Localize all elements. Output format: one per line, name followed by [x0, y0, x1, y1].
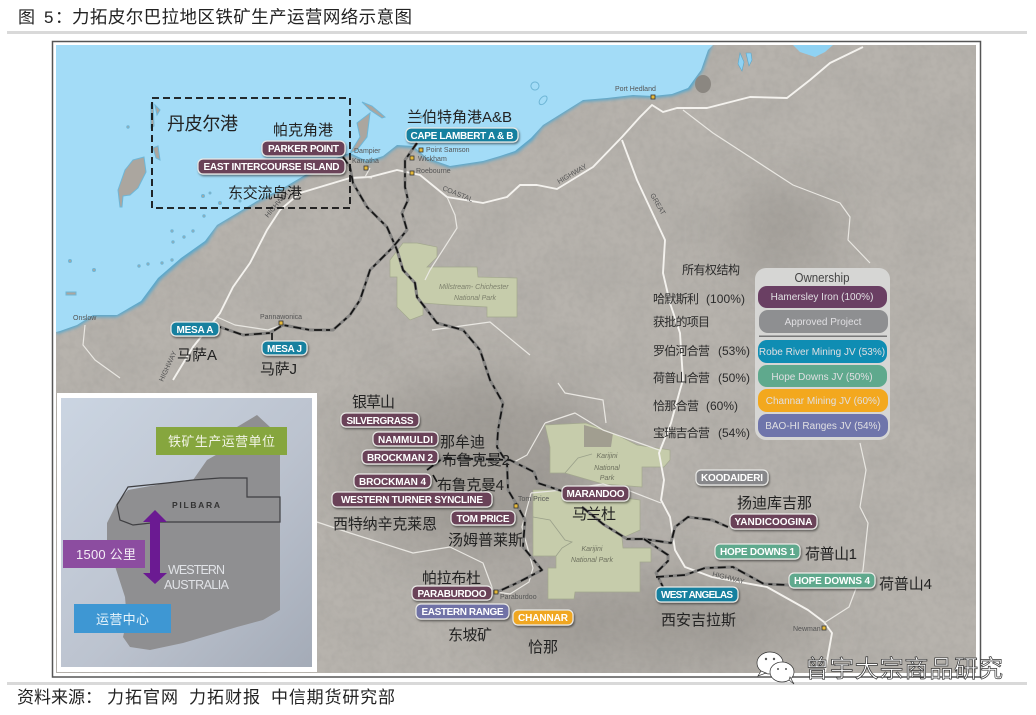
pill: Nammuldi: NAMMULDI: [378, 435, 433, 446]
pill: East Intercourse Island: EAST INTERCOURSE ISLAND: [204, 162, 340, 173]
pill: West Angelas: WEST ANGELAS: [661, 590, 733, 601]
national park: Karijini: National Park: [571, 557, 614, 564]
port and mine labels: [167, 109, 932, 656]
ownership legend: Ownership: [794, 270, 850, 285]
pill: Parker Point: PARKER POINT: [268, 144, 339, 155]
ownership Chinese text: 所有权结构: [682, 262, 740, 277]
pill: Hope Downs 4: HOPE DOWNS 4: [794, 576, 870, 587]
pill: Brockman 4: BROCKMAN 4: [359, 477, 426, 488]
ownership Chinese text: (54%): [718, 426, 750, 440]
label: 马萨A: 马萨A: [177, 347, 217, 364]
label: 那牟迪: 那牟迪: [440, 434, 485, 451]
title: 5: [44, 8, 53, 27]
title: ：: [55, 8, 72, 27]
ownership Chinese text: 宝瑞吉合营: [653, 425, 710, 440]
ownership Chinese text: [653, 262, 750, 440]
pill: Tom Price: TOM PRICE: [456, 514, 510, 525]
outline: Pilbara region: [117, 478, 280, 525]
national park: Millstream-Chichester: [390, 243, 517, 320]
pill: Western Turner Syncline: WESTERN TURNER SYNCLINE: [341, 495, 483, 506]
pill: Brockman 4: [354, 474, 431, 488]
national park: Karijini: National: [594, 465, 620, 472]
town markers and labels: Paraburdoo: [500, 594, 537, 601]
label: 恰那: 恰那: [528, 639, 558, 656]
pill: Mesa A: [171, 322, 219, 336]
pill: Yandicoogina: [730, 514, 817, 529]
pill: Paraburdoo: [412, 586, 492, 600]
ownership Chinese text: 哈默斯利: [653, 291, 699, 306]
sea: [56, 45, 833, 334]
pill: Eastern Range: EASTERN RANGE: [422, 607, 504, 618]
label: 帕克角港: 帕克角港: [273, 122, 333, 139]
pill: Silvergrass: SILVERGRASS: [346, 416, 414, 427]
town markers and labels: Onslow: [73, 315, 97, 322]
national park: Millstream-Chichester: National Park: [454, 295, 497, 302]
source note: 力拓官网: [107, 688, 178, 707]
label: 东坡矿: 东坡矿: [448, 627, 492, 644]
label: Western Australia: WESTERN: [168, 563, 225, 577]
pill: East Intercourse Island: [198, 159, 345, 174]
town markers and labels: [73, 86, 826, 633]
label: 马兰杜: 马兰杜: [572, 506, 616, 523]
pill: Marandoo: MARANDOO: [566, 489, 625, 500]
label: 布鲁克曼4: 布鲁克曼4: [437, 477, 504, 494]
ownership legend: BAO-HI Ranges JV (54%): [765, 421, 881, 432]
source note: 力拓财报: [189, 688, 260, 707]
arrow: distance: [143, 510, 167, 584]
label: 西特纳辛克莱恩: 西特纳辛克莱恩: [333, 516, 437, 533]
pill: Nammuldi: [373, 432, 438, 446]
label: 扬迪库吉那: 扬迪库吉那: [737, 495, 812, 512]
inset: Western Australia locator: [57, 393, 317, 672]
ownership legend: Hope Downs JV (50%): [771, 372, 873, 383]
ownership legend: [755, 268, 890, 440]
label: 汤姆普莱斯: 汤姆普莱斯: [448, 532, 523, 549]
ownership Chinese text: 恰那合营: [653, 398, 699, 413]
town markers and labels: Wickham: [418, 156, 447, 163]
label: 荷普山4: 荷普山4: [879, 576, 932, 593]
national park: Karijini: Park: [600, 475, 615, 482]
label: 帕拉布杜: 帕拉布杜: [422, 570, 481, 587]
mine pills: [171, 128, 875, 625]
town markers and labels: Point Samson: [426, 147, 470, 154]
map frame: [52, 42, 980, 677]
box: 1500 km: 1500 公里: [76, 547, 136, 562]
pill: Western Turner Syncline: [332, 492, 492, 507]
town markers and labels: Newman: [793, 626, 821, 633]
watermark: WeChat account: [757, 652, 1003, 684]
town markers and labels: Roebourne: [416, 168, 451, 175]
label: 荷普山1: 荷普山1: [805, 546, 857, 563]
pill: Mesa A: MESA A: [176, 325, 214, 336]
dashed highlight box: Dampier port: [152, 98, 350, 208]
title: 力拓皮尔巴拉地区铁矿生产运营网络示意图: [72, 7, 412, 27]
roads: [83, 47, 870, 672]
pill: Hope Downs 1: HOPE DOWNS 1: [720, 547, 795, 558]
source note: 中信期货研究部: [271, 688, 395, 707]
pill: Channar: [513, 610, 573, 625]
town markers and labels: Port Hedland: [615, 86, 656, 93]
pill: Eastern Range: [416, 604, 509, 619]
label: 马萨J: 马萨J: [260, 361, 297, 378]
ownership legend: Approved Project: [785, 317, 862, 328]
box: operations: 铁矿生产运营单位: [168, 434, 275, 449]
pill: West Angelas: [656, 587, 738, 602]
ownership Chinese text: (100%): [706, 292, 745, 306]
town markers and labels: HIGHWAY: [712, 571, 745, 586]
town markers and labels: COASTAL: [441, 185, 474, 204]
label: 兰伯特角港: 兰伯特角港A&B: [407, 109, 512, 126]
pill: Mesa J: MESA J: [267, 344, 302, 355]
box: operations centre: [74, 604, 171, 633]
pill: Hope Downs 4: [789, 573, 875, 588]
pill: Koodaideri: KOODAIDERI: [701, 473, 763, 484]
label: 丹皮尔港: 丹皮尔港: [167, 114, 238, 134]
box: operations: [156, 427, 287, 455]
ownership Chinese text: (53%): [718, 344, 750, 358]
label: Pilbara: PILBARA: [172, 500, 220, 510]
icon: WeChat: [757, 652, 794, 684]
ownership legend: Channar Mining JV (60%): [766, 396, 880, 407]
town markers and labels: Tom Price: [518, 496, 549, 503]
box: operations centre: 运营中心: [96, 612, 149, 627]
national park: Karijini: [533, 423, 670, 599]
source note: 资料来源：: [17, 688, 102, 707]
source note: [7, 682, 1027, 707]
pill: Yandicoogina: YANDICOOGINA: [734, 517, 812, 528]
pill: Mesa J: [262, 341, 307, 355]
town markers and labels: Dampier: [354, 148, 381, 155]
ownership legend: Robe River Mining JV (53%): [759, 347, 885, 358]
pill: Koodaideri: [696, 470, 768, 485]
railways: [220, 143, 789, 592]
pill: Silvergrass: [341, 413, 419, 427]
label: 西安吉拉斯: 西安吉拉斯: [661, 612, 736, 629]
label: Western Australia: AUSTRALIA: [164, 578, 230, 592]
watermark: WeChat account: 曾宇大宗商品研究: [805, 656, 1003, 683]
box: 1500 km: [63, 540, 145, 568]
ownership Chinese text: 荷普山合营: [653, 370, 710, 385]
pill: Parker Point: [262, 141, 345, 156]
pill: Tom Price: [451, 511, 515, 525]
ownership Chinese text: 获批的项目: [653, 314, 710, 329]
label: 东交流岛港: 东交流岛港: [228, 184, 302, 202]
islands: [66, 82, 547, 295]
ownership Chinese text: (60%): [706, 399, 738, 413]
pill: Channar: CHANNAR: [518, 613, 569, 624]
label: Western Australia: [164, 563, 230, 592]
title: 图: [18, 8, 35, 27]
town markers and labels: Karratha: [352, 158, 379, 165]
town markers and labels: Pannawonica: [260, 314, 302, 321]
ownership Chinese text: (50%): [718, 371, 750, 385]
ownership Chinese text: 罗伯河合营: [653, 343, 710, 358]
label: 银草山: 银草山: [352, 394, 395, 411]
map: [56, 45, 976, 673]
pill: Hope Downs 1: [715, 544, 800, 559]
town markers and labels: GREAT: [648, 192, 666, 217]
pill: Paraburdoo: PARABURDOO: [418, 589, 487, 600]
pill: Cape Lambert: CAPE LAMBERT A & B: [410, 131, 514, 142]
map: Western Australia silhouette: [107, 415, 280, 650]
national park: Karijini: Karijini: [596, 453, 618, 460]
pill: Brockman 2: BROCKMAN 2: [367, 453, 433, 464]
national park: Karijini: Karijini: [581, 546, 603, 553]
town markers and labels: HIGHWAY: [264, 190, 291, 219]
town markers and labels: HIGHWAY: [556, 163, 589, 186]
label: 布鲁克曼2: 布鲁克曼2: [442, 452, 510, 469]
ownership legend: Hamersley Iron (100%): [771, 292, 873, 303]
pill: Brockman 2: [362, 450, 438, 464]
national park: Millstream-Chichester: Millstream- Chichester: [439, 284, 509, 291]
pill: Marandoo: [562, 486, 629, 501]
town markers and labels: HIGHWAY: [158, 350, 179, 383]
